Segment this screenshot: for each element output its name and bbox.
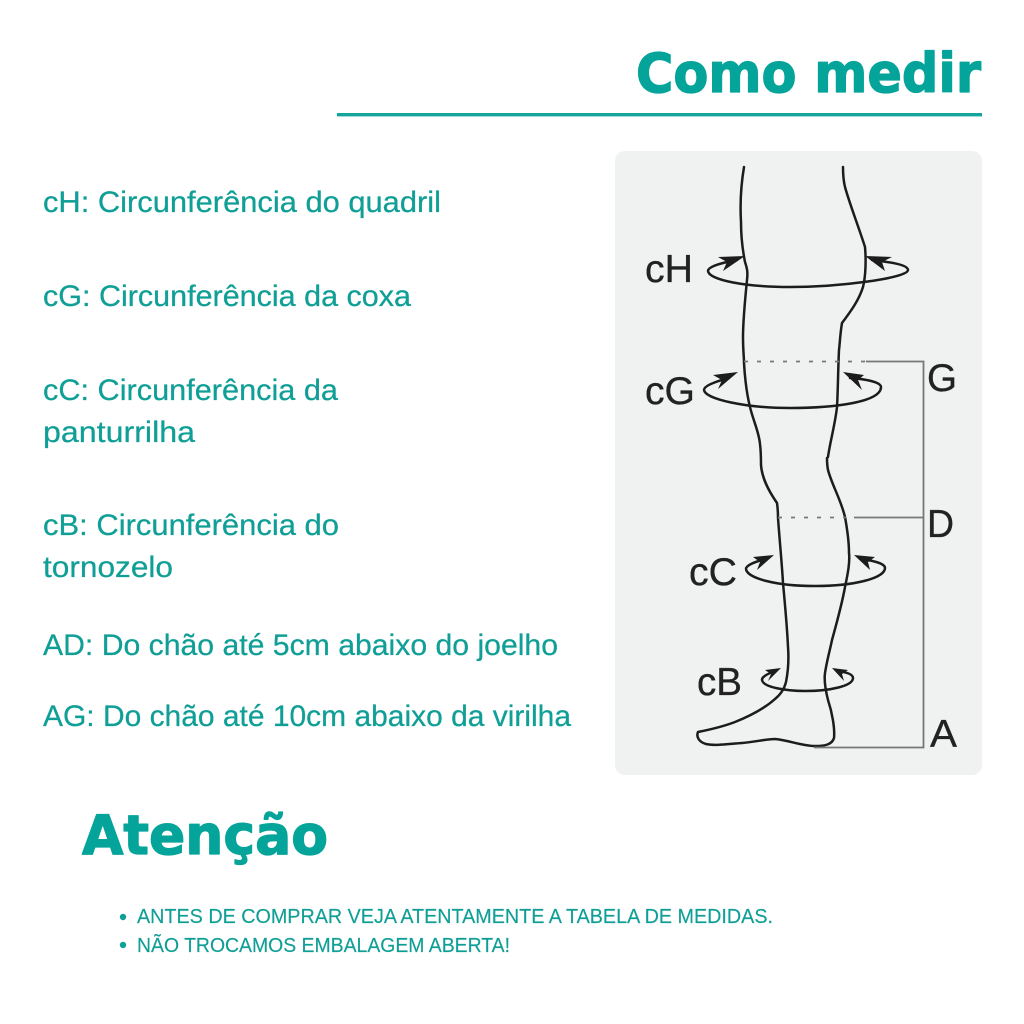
- diagram labels: [645, 248, 957, 756]
- title underline: [337, 113, 982, 116]
- text: cB: tornozelo: [43, 551, 173, 584]
- diagram labels: G: [927, 357, 957, 400]
- text: cC: [43, 374, 339, 449]
- leg outline: [697, 167, 866, 746]
- arrow: cG: [704, 372, 881, 408]
- diagram labels: cB: [697, 661, 742, 704]
- bullet 1: ANTES DE COMPRAR VEJA ATENTAMENTE A TABELA DE MEDIDAS.: [137, 906, 773, 928]
- text: cB: cB: Circunferência do: [43, 509, 339, 542]
- text: AG: AG: Do chão até 10cm abaixo da virilha: [43, 700, 572, 733]
- diagram labels: D: [927, 503, 954, 546]
- panel: leg measurement diagram: [615, 151, 982, 775]
- title: Como medir: Como medir: [636, 42, 981, 105]
- text: cC: cC: Circunferência da: [43, 374, 339, 407]
- diagram labels: A: [930, 713, 957, 756]
- text: cH: cH: Circunferência do quadril: [43, 186, 441, 219]
- text: cB: [43, 509, 339, 584]
- text: cC: panturrilha: [43, 416, 196, 449]
- height guide lines: [744, 362, 924, 748]
- heading: Atenção: Atenção: [82, 804, 328, 867]
- diagram labels: cH: [645, 248, 693, 291]
- arrow: cC: [746, 555, 885, 586]
- diagram labels: cC: [689, 551, 737, 594]
- diagram labels: cG: [645, 370, 695, 413]
- arrow: cB: [762, 668, 853, 691]
- measurement definitions list: [43, 186, 572, 733]
- bullet 2: NÃO TROCAMOS EMBALAGEM ABERTA!: [137, 933, 510, 957]
- text: AD: AD: Do chão até 5cm abaixo do joelho: [43, 629, 558, 662]
- warning bullet list: [120, 906, 773, 957]
- arrow: cH: [708, 256, 908, 287]
- text: cG: cG: Circunferência da coxa: [43, 280, 412, 313]
